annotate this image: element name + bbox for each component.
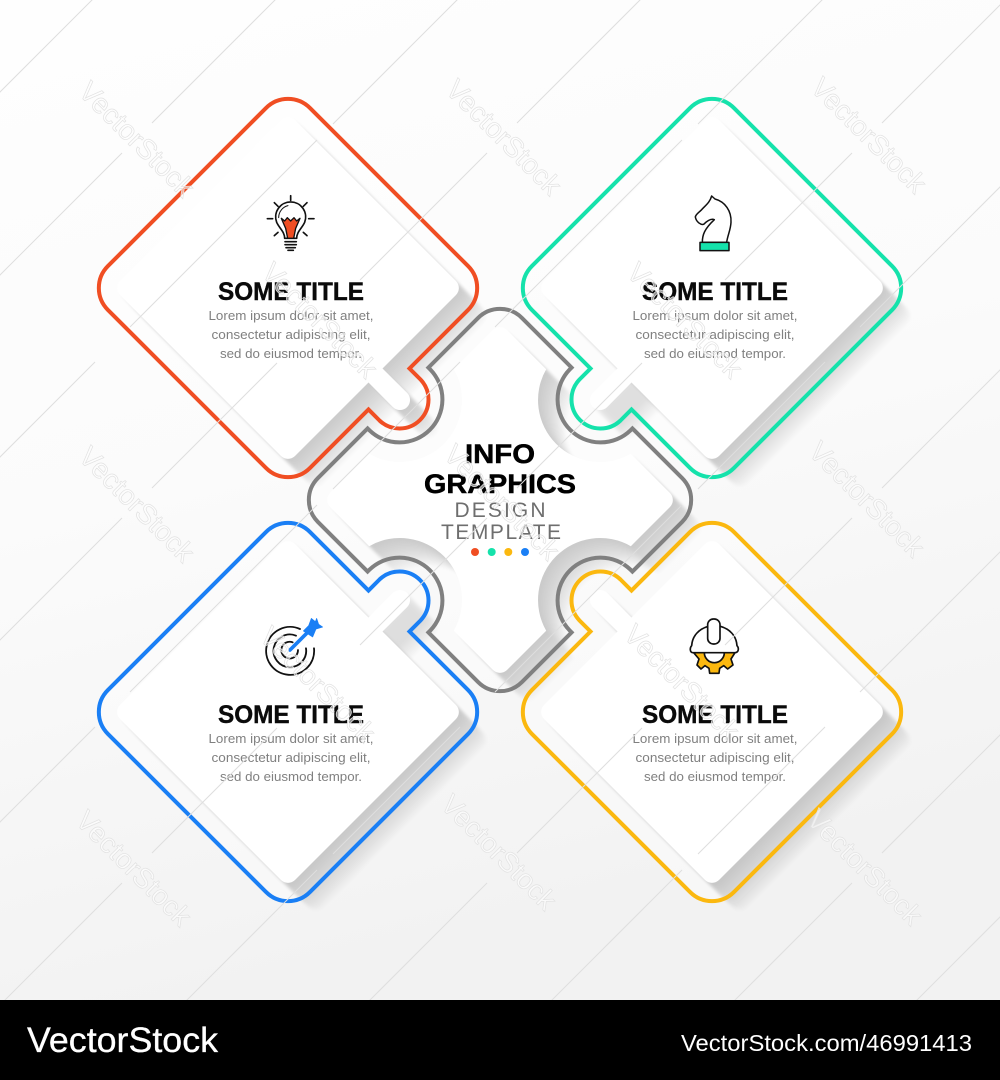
panel: green step: [523, 99, 901, 477]
watermark layer: VectorStock: [618, 618, 746, 747]
body text: [632, 309, 798, 361]
center panel white face: [327, 327, 673, 673]
watermark layer: VectorStock: [256, 256, 384, 385]
center heading: TEMPLATE: [441, 521, 561, 544]
body text: consectetur adipiscing elit,: [212, 328, 370, 342]
body text: sed do eiusmod tempor.: [644, 770, 786, 784]
panel: red step: [99, 99, 477, 477]
title: SOME TITLE: [218, 701, 364, 729]
green outline: [523, 99, 901, 477]
body text: [208, 309, 374, 361]
title: SOME TITLE: [642, 701, 788, 729]
watermark layer: VectorStock: [440, 73, 568, 202]
body text: Lorem ipsum dolor sit amet,: [208, 732, 374, 746]
watermark layer: VectorStock: [73, 440, 201, 569]
body text: Lorem ipsum dolor sit amet,: [208, 309, 374, 323]
body text: [632, 732, 798, 784]
blue outline: [99, 523, 477, 901]
icon: target with arrow: [266, 618, 323, 675]
body text: sed do eiusmod tempor.: [220, 770, 362, 784]
body text: Lorem ipsum dolor sit amet,: [632, 309, 798, 323]
watermark layer: VectorStock: [621, 256, 749, 385]
center heading: GRAPHICS: [424, 469, 576, 499]
footer id: VectorStock.com/46991413: [681, 1030, 972, 1056]
watermark layer: VectorStock: [70, 804, 198, 933]
title: SOME TITLE: [218, 278, 364, 306]
body text: consectetur adipiscing elit,: [212, 751, 370, 765]
center heading: [424, 439, 576, 544]
panel: yellow step: [523, 523, 901, 901]
watermark layer: VectorStock: [435, 788, 563, 917]
body text: consectetur adipiscing elit,: [636, 328, 794, 342]
icon: light bulb: [267, 196, 314, 250]
title: SOME TITLE: [642, 278, 788, 306]
icon: chess knight: [695, 196, 731, 251]
watermark layer: VectorStock: [805, 71, 933, 200]
center panel outline: [309, 309, 691, 691]
center panel shadow: [329, 329, 701, 701]
watermark layer: VectorStock: [438, 438, 566, 567]
panel shadows: [119, 119, 911, 911]
red outline: [99, 99, 477, 477]
body text: sed do eiusmod tempor.: [644, 347, 786, 361]
body text: [208, 732, 374, 784]
icon: helmet and gear: [690, 619, 738, 673]
body text: Lorem ipsum dolor sit amet,: [632, 732, 798, 746]
panel lighter bands: [99, 99, 901, 901]
watermark layer: VectorStock: [73, 75, 201, 204]
body text: sed do eiusmod tempor.: [220, 347, 362, 361]
watermark layer: VectorStock: [801, 803, 929, 932]
color dots: [471, 548, 529, 556]
yellow outline: [523, 523, 901, 901]
footer logo: VectorStock: [27, 1021, 219, 1060]
watermark layer: VectorStock: [803, 435, 931, 564]
panel white faces: [117, 117, 883, 883]
body text: consectetur adipiscing elit,: [636, 751, 794, 765]
center heading: DESIGN: [454, 499, 546, 522]
footer bar: [0, 1000, 1000, 1080]
watermark layer: VectorStock: [254, 620, 382, 749]
center heading: INFO: [465, 439, 535, 469]
panel: blue step: [99, 523, 477, 901]
